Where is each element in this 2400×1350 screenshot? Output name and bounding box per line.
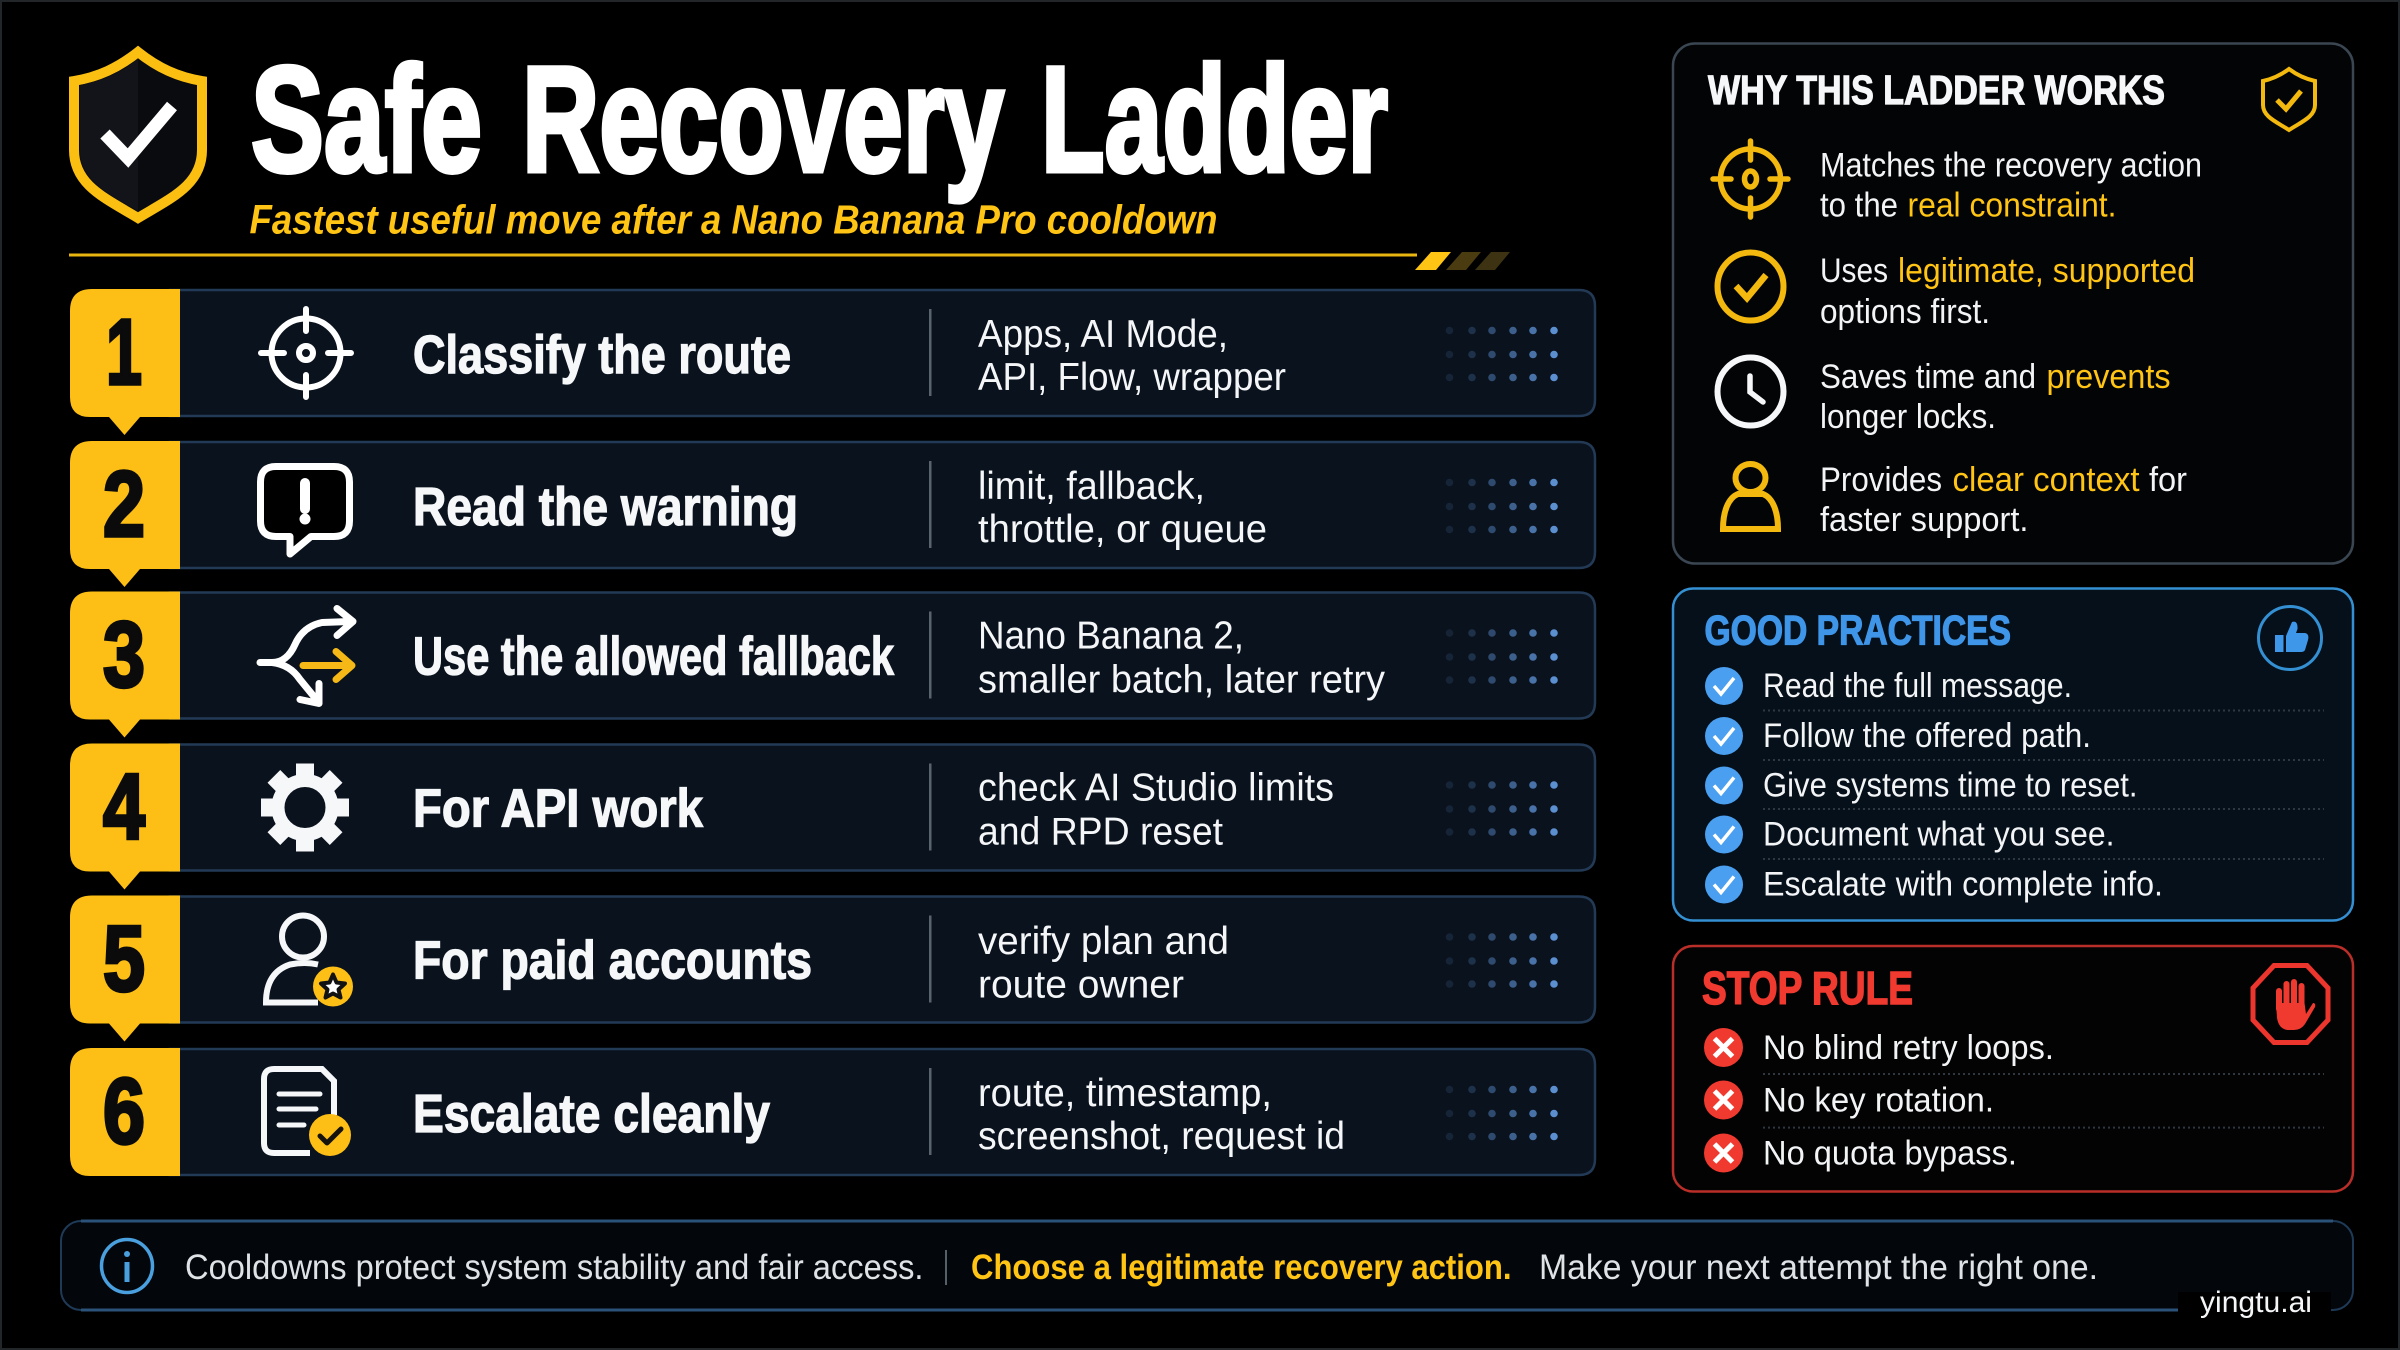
icon: stop sign with hand bbox=[2253, 966, 2328, 1042]
practice 1: Read the full message. bbox=[1763, 667, 2072, 705]
title: Recovery bbox=[522, 35, 1004, 203]
reason 4: clear context bbox=[1952, 461, 2140, 499]
reason 4: faster support. bbox=[1820, 501, 2028, 539]
reason 3 bbox=[1820, 358, 2170, 436]
dotted separators bbox=[1763, 710, 2324, 859]
icon: info bbox=[102, 1240, 152, 1292]
step detail: route, timestamp, bbox=[978, 1072, 1272, 1115]
divider bbox=[929, 309, 932, 396]
divider bbox=[929, 612, 932, 698]
number badge bbox=[70, 592, 180, 738]
header rule with progress marks bbox=[69, 252, 1510, 270]
number: 5 bbox=[103, 906, 145, 1010]
footer message: Cooldowns protect system stability and fair access. bbox=[185, 1247, 924, 1287]
number badge bbox=[70, 441, 180, 587]
banner top and bottom edges bbox=[81, 1221, 2333, 1310]
step 1: classify the route bbox=[70, 289, 1595, 435]
step heading: Use the allowed fallback bbox=[413, 626, 895, 686]
title bbox=[251, 35, 1388, 203]
icon: clock bbox=[1718, 358, 1784, 426]
step detail: throttle, or queue bbox=[978, 508, 1267, 551]
step detail: and RPD reset bbox=[978, 810, 1223, 854]
reason 3: Saves time and bbox=[1820, 358, 2036, 396]
step detail: API, Flow, wrapper bbox=[978, 356, 1286, 399]
number: 4 bbox=[103, 754, 145, 858]
reason 4: Provides bbox=[1820, 461, 1942, 499]
title: Safe bbox=[251, 35, 482, 203]
step detail: verify plan and bbox=[978, 920, 1229, 963]
step 3: use the allowed fallback bbox=[70, 592, 1595, 738]
row panel bbox=[170, 896, 1595, 1022]
panel heading: GOOD PRACTICES bbox=[1704, 606, 2011, 654]
icon: target bbox=[261, 309, 351, 397]
step heading: For API work bbox=[413, 778, 704, 838]
reason 1: to the bbox=[1820, 186, 1898, 224]
reason 1: Matches the recovery action bbox=[1820, 146, 2202, 184]
number badge bbox=[70, 1048, 180, 1176]
step detail: limit, fallback, bbox=[978, 465, 1205, 508]
rule 1: No blind retry loops. bbox=[1763, 1029, 2054, 1067]
practice 2: Follow the offered path. bbox=[1763, 717, 2091, 755]
step detail: check AI Studio limits bbox=[978, 766, 1334, 810]
reason 2: legitimate, supported bbox=[1898, 252, 2195, 290]
title: Ladder bbox=[1041, 35, 1388, 203]
divider bbox=[929, 764, 932, 850]
step detail: route owner bbox=[978, 964, 1184, 1006]
number: 6 bbox=[103, 1059, 145, 1163]
dotted separators bbox=[1763, 1074, 2324, 1128]
reason 3: longer locks. bbox=[1820, 398, 1996, 436]
practice 5: Escalate with complete info. bbox=[1763, 866, 2163, 904]
step detail: screenshot, request id bbox=[978, 1115, 1345, 1158]
number: 3 bbox=[103, 602, 145, 706]
number badge bbox=[70, 896, 180, 1042]
footer banner bbox=[61, 1221, 2353, 1320]
icon: branching arrows bbox=[260, 608, 353, 704]
icon: target bbox=[1713, 141, 1788, 217]
row panel bbox=[170, 592, 1595, 718]
panel: good practices bbox=[1673, 588, 2353, 920]
icon: warning speech bubble bbox=[260, 466, 350, 554]
panel heading: WHY THIS LADDER WORKS bbox=[1708, 67, 2165, 113]
panel: stop rule bbox=[1673, 946, 2353, 1192]
icon: person bbox=[1723, 464, 1778, 529]
step detail: Nano Banana 2, bbox=[978, 614, 1244, 658]
icon: shield with check bbox=[74, 52, 202, 218]
footer highlight: Choose a legitimate recovery action. bbox=[971, 1248, 1512, 1287]
step detail bbox=[978, 313, 1286, 399]
number: 2 bbox=[103, 452, 145, 556]
step 4: for api work bbox=[70, 744, 1595, 890]
icon: user with star badge bbox=[266, 916, 353, 1006]
row panel bbox=[170, 290, 1595, 416]
step detail: smaller batch, later retry bbox=[978, 658, 1386, 702]
number badge bbox=[70, 289, 180, 435]
row panel bbox=[170, 1049, 1595, 1175]
subtitle: Fastest useful move after a Nano Banana Pro cooldown bbox=[250, 196, 1218, 242]
step heading: Read the warning bbox=[413, 477, 798, 537]
step detail bbox=[978, 465, 1267, 551]
icon: thumbs up bbox=[2258, 606, 2322, 670]
practice 3: Give systems time to reset. bbox=[1763, 767, 2138, 805]
row panel bbox=[170, 442, 1595, 568]
number: 1 bbox=[106, 300, 142, 404]
reason 2: Uses bbox=[1820, 252, 1888, 290]
row panel bbox=[170, 744, 1595, 870]
icon: small shield bbox=[2263, 69, 2315, 130]
step detail bbox=[978, 766, 1334, 854]
panel heading: STOP RULE bbox=[1702, 962, 1913, 1014]
icon: document with check bbox=[264, 1069, 351, 1156]
step 5: for paid accounts bbox=[70, 896, 1595, 1042]
footer closing line: Make your next attempt the right one. bbox=[1539, 1247, 2098, 1287]
reason 3: prevents bbox=[2046, 358, 2170, 396]
icon: check circle bbox=[1718, 252, 1784, 320]
number badge bbox=[70, 744, 180, 890]
reason 1: real constraint. bbox=[1908, 186, 2116, 224]
reason 4 bbox=[1820, 461, 2187, 539]
panel: why this ladder works bbox=[1673, 44, 2353, 564]
reason 4: for bbox=[2149, 461, 2187, 499]
step 2: read the warning bbox=[70, 441, 1595, 587]
watermark: yingtu.ai bbox=[2200, 1286, 2312, 1319]
icon: gear bbox=[261, 764, 349, 852]
reason 2 bbox=[1820, 252, 2195, 331]
watermark gap bbox=[2178, 1292, 2331, 1320]
step heading: Classify the route bbox=[413, 325, 791, 385]
rule 3: No quota bypass. bbox=[1763, 1134, 2017, 1172]
step detail bbox=[978, 614, 1386, 702]
step detail: Apps, AI Mode, bbox=[978, 313, 1228, 356]
step 6: escalate cleanly bbox=[70, 1048, 1595, 1176]
step heading: For paid accounts bbox=[413, 930, 812, 990]
step heading: Escalate cleanly bbox=[413, 1084, 770, 1144]
rule 2: No key rotation. bbox=[1763, 1082, 1994, 1120]
divider bbox=[929, 916, 932, 1002]
divider bbox=[929, 461, 932, 548]
practice 4: Document what you see. bbox=[1763, 816, 2114, 854]
divider bbox=[929, 1068, 932, 1155]
reason 1 bbox=[1820, 146, 2202, 224]
reason 2: options first. bbox=[1820, 293, 1990, 331]
step detail bbox=[978, 1072, 1345, 1158]
step detail bbox=[978, 920, 1229, 1006]
